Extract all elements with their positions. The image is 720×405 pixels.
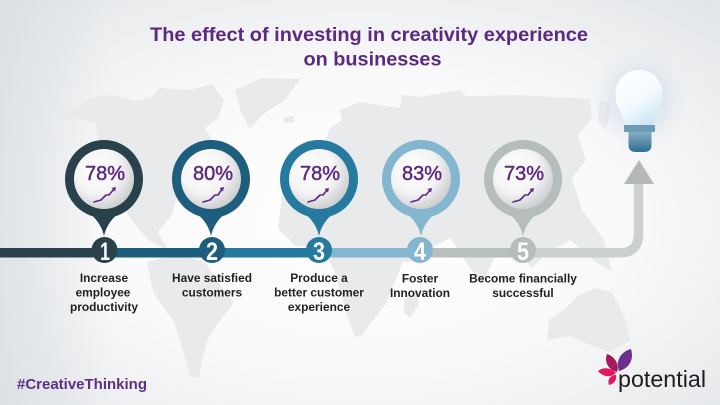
pin 4: 83% [382, 140, 460, 266]
logo: potential: potential [618, 366, 706, 392]
pin 4: 83%: 83% [402, 163, 442, 185]
hashtag: #CreativeThinking [17, 377, 147, 393]
title: The effect of investing in creativity experience [150, 25, 588, 46]
pin 1: 78%: 1 [100, 238, 110, 266]
pin 5: 73%: 73% [504, 163, 544, 185]
light bulb [589, 48, 689, 152]
label 5: Become financially [469, 272, 577, 286]
pin 5: 73%: 5 [517, 238, 529, 266]
world map [50, 78, 630, 377]
label 3 [274, 271, 364, 314]
label 2: customers [182, 286, 242, 300]
title: on businesses [304, 48, 442, 70]
pin 3: 78% [280, 140, 358, 266]
pin 2: 80% [172, 140, 250, 266]
label 1 [70, 271, 138, 314]
pin 3: 78%: 3 [313, 238, 325, 266]
pin 2: 80%: 2 [206, 238, 218, 266]
title [150, 25, 588, 70]
label 4 [390, 272, 450, 300]
label 4: Foster [402, 272, 439, 286]
label 3: experience [288, 300, 350, 314]
label 2 [172, 271, 252, 300]
logo: potential [598, 349, 706, 392]
label 1: productivity [70, 300, 138, 314]
label 3: better customer [274, 286, 364, 300]
arrow head [624, 160, 654, 184]
pin 2: 80%: 80% [193, 163, 233, 185]
label 4: Innovation [390, 286, 450, 300]
timeline bar [0, 180, 638, 258]
pin 1: 78%: 78% [85, 163, 125, 185]
label 1: employee [76, 286, 131, 300]
label 3: Produce a [290, 271, 348, 285]
pin 4: 83%: 4 [414, 238, 426, 266]
pin 5: 73% [484, 140, 562, 266]
label 5 [469, 272, 577, 300]
label 2: Have satisfied [172, 271, 252, 285]
pin 3: 78%: 78% [300, 163, 340, 185]
pin 1: 78% [65, 140, 143, 266]
label 1: Increase [80, 271, 129, 285]
label 5: successful [492, 286, 554, 300]
